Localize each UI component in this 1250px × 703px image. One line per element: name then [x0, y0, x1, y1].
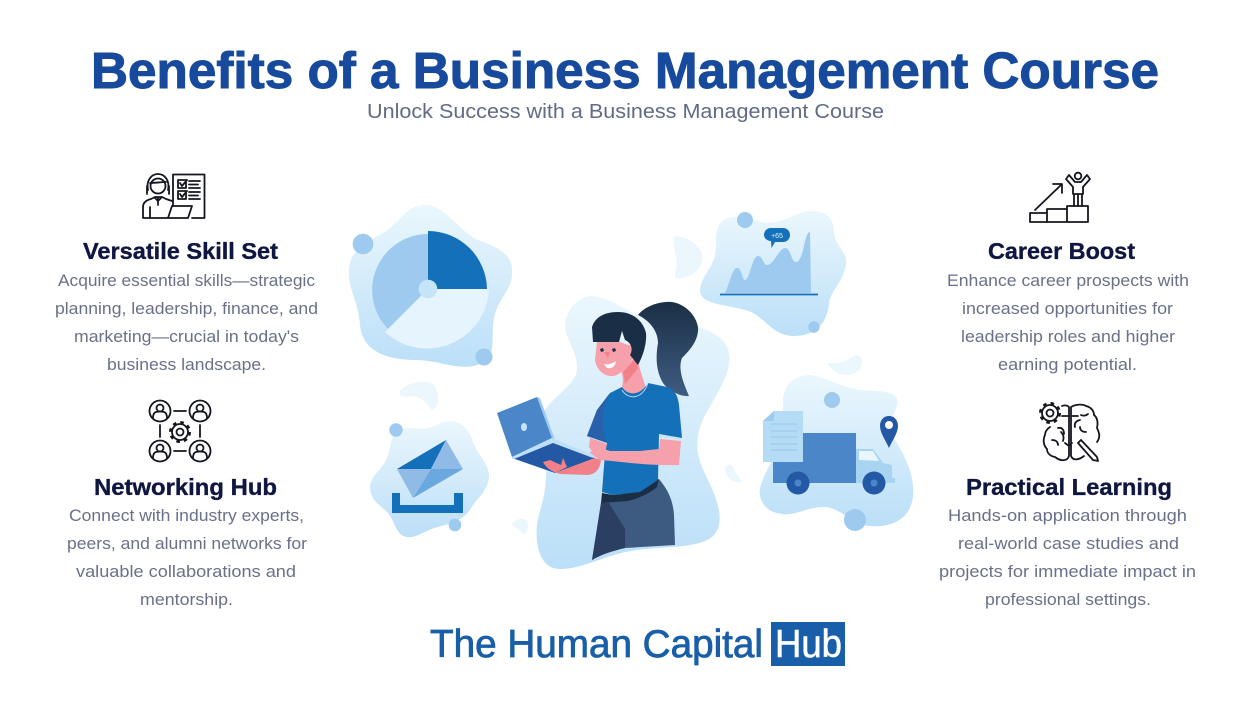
illustration: area chart blob: +65 — [771, 233, 783, 240]
illustration: envelope blob — [370, 382, 528, 537]
text: practical learning description: Hands-on application through — [948, 507, 1187, 525]
logo: The Human Capital Hub: The Human Capital — [430, 623, 763, 666]
illustration: area chart blob — [674, 211, 846, 336]
text: career boost description — [947, 272, 1189, 374]
text: practical learning description: projects for immediate impact in — [939, 563, 1196, 581]
heading: career boost: Career Boost — [988, 238, 1135, 264]
illustration: delivery truck blob — [725, 355, 913, 531]
title: Benefits of a Business Management Course — [91, 42, 1159, 99]
text: networking hub description: valuable collaborations and — [76, 563, 296, 581]
icon: person with checklist — [143, 174, 204, 218]
heading: networking hub: Networking Hub — [94, 474, 277, 500]
text: networking hub description — [67, 507, 308, 609]
panel: practical learning — [939, 404, 1196, 609]
text: practical learning description: real-world case studies and — [958, 535, 1179, 553]
text: practical learning description: professional settings. — [985, 591, 1151, 609]
logo: The Human Capital Hub: Hub — [775, 623, 842, 666]
illustration: woman with laptop — [497, 296, 730, 569]
text: versatile skill set description: planning, leadership, finance, and — [55, 300, 318, 318]
text: networking hub description: peers, and alumni networks for — [67, 535, 308, 553]
panel: networking hub — [67, 400, 308, 609]
heading: versatile skill set: Versatile Skill Set — [83, 238, 278, 264]
icon: connected people with gear — [150, 400, 210, 462]
illustration: pie chart blob — [349, 205, 512, 367]
text: career boost description: increased opportunities for — [962, 300, 1174, 318]
text: career boost description: earning potential. — [998, 356, 1137, 374]
text: career boost description: Enhance career prospects with — [947, 272, 1189, 290]
heading: practical learning: Practical Learning — [966, 474, 1172, 500]
text: networking hub description: Connect with industry experts, — [69, 507, 304, 525]
text: practical learning description — [939, 507, 1196, 609]
text: networking hub description: mentorship. — [140, 591, 233, 609]
text: career boost description: leadership roles and higher — [961, 328, 1176, 346]
text: versatile skill set description: marketing—crucial in today's — [74, 328, 299, 346]
panel: versatile skill set — [55, 174, 318, 374]
text: versatile skill set description: Acquire essential skills—strategic — [58, 272, 315, 290]
icon: person on podium with arrow — [1030, 173, 1090, 222]
subtitle: Unlock Success with a Business Management Course — [367, 100, 884, 123]
icon: brain with gear and pencil — [1040, 404, 1099, 461]
text: versatile skill set description: business landscape. — [107, 356, 266, 374]
text: versatile skill set description — [55, 272, 318, 374]
panel: career boost — [947, 173, 1189, 374]
